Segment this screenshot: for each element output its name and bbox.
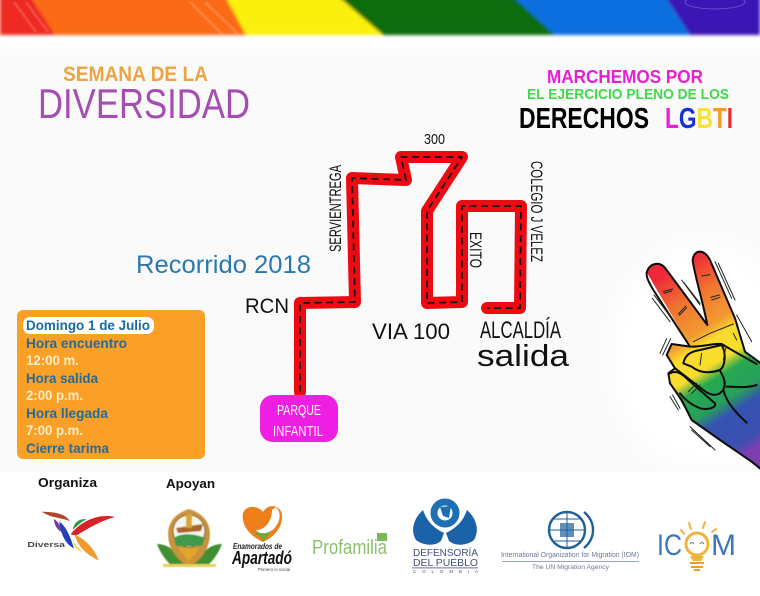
panel: schedule: Cierre tarima	[26, 441, 109, 456]
title: Semana de la Diversidad: SEMANA DE LA	[63, 63, 208, 86]
label: Apoyan: Apoyan	[166, 476, 215, 491]
logo: Enamorados de Apartado	[231, 506, 292, 572]
headline: Marchemos por derechos LGBTI	[519, 67, 733, 135]
route map line	[300, 157, 521, 392]
route label: Alcaldia: ALCALDÍA	[480, 317, 561, 344]
logo: coat of arms	[157, 509, 222, 567]
route label: salida: salida	[477, 338, 570, 373]
route label: RCN: RCN	[245, 295, 289, 318]
illustration: rainbow peace hand	[646, 250, 760, 470]
panel: schedule: Hora encuentro	[26, 336, 127, 351]
route label: Exito: EXITO	[466, 232, 485, 268]
panel: schedule: 12:00 m.	[26, 353, 79, 368]
logo: IOM	[501, 512, 639, 571]
title: Semana de la Diversidad: DIVERSIDAD	[38, 80, 250, 127]
route label: 300: 300	[424, 131, 445, 148]
logo: ICOM	[657, 522, 736, 570]
logo: Enamorados de Apartado: Enamorados de	[233, 542, 282, 551]
end point: Parque Infantil: PARQUE	[277, 402, 321, 419]
rainbow banner	[0, 0, 760, 35]
route label: Servientrega: SERVIENTREGA	[326, 165, 345, 252]
logo: Enamorados de Apartado: Apartadó	[231, 548, 292, 568]
title: Semana de la Diversidad	[38, 63, 250, 127]
end point: Parque Infantil: INFANTIL	[273, 423, 323, 440]
panel: schedule: 7:00 p.m.	[26, 423, 83, 438]
logo: IOM: International Organization for Migration (IOM)	[501, 552, 639, 559]
panel: schedule: Domingo 1 de Julio	[26, 318, 150, 333]
logo: Diversa hummingbird: Diversa	[27, 542, 65, 549]
logo: Defensoria del Pueblo: DEFENSORÍA	[413, 546, 478, 559]
logo: Diversa hummingbird	[27, 512, 115, 560]
logo: Defensoria del Pueblo: DEL PUEBLO	[413, 557, 478, 569]
logo: ICOM: IC	[657, 529, 682, 562]
route label: Colegio J Velez: COLEGIO J VELEZ	[527, 161, 546, 262]
heading: Recorrido 2018: Recorrido 2018	[136, 251, 311, 279]
headline: Marchemos por derechos LGBTI: DERECHOS	[519, 103, 649, 135]
panel: schedule: Hora llegada	[26, 406, 108, 421]
end point: Parque Infantil	[260, 395, 338, 442]
sponsors strip background	[0, 472, 760, 596]
logo: ICOM: M	[711, 529, 736, 562]
logo: Profamilia: Profamilia	[312, 537, 388, 559]
headline: Marchemos por derechos LGBTI: LGBTI	[665, 103, 733, 135]
logo: Enamorados de Apartado: Primero lo social	[258, 567, 290, 572]
logo: Defensoria del Pueblo	[412, 502, 478, 574]
headline: Marchemos por derechos LGBTI: MARCHEMOS POR	[547, 67, 703, 87]
label: Organiza: Organiza	[38, 475, 98, 490]
panel: schedule: Hora salida	[26, 371, 98, 386]
panel: schedule	[17, 310, 205, 459]
panel: schedule: 2:00 p.m.	[26, 388, 83, 403]
logo: Defensoria del Pueblo: COLOMBIA	[413, 569, 478, 574]
route label: Via 100: VIA 100	[372, 319, 450, 344]
logo: IOM: The UN Migration Agency	[532, 564, 610, 571]
headline: Marchemos por derechos LGBTI: EL EJERCICIO PLENO DE LOS	[527, 86, 729, 103]
